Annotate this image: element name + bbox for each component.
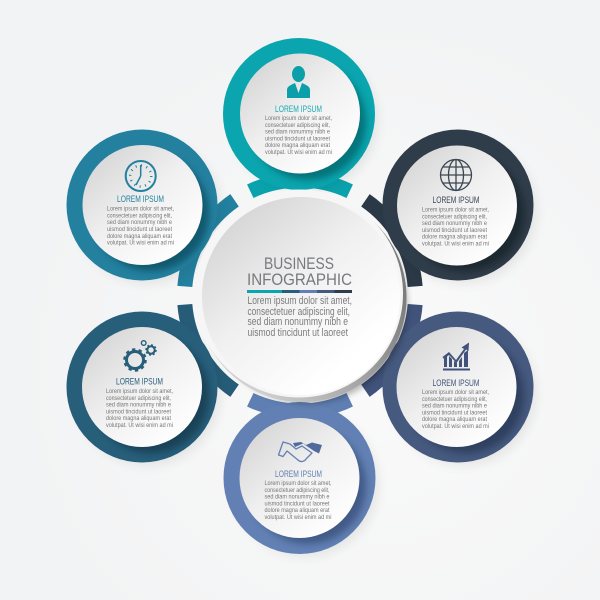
arc connector: upper right: [358, 188, 433, 293]
text block: lower left: uismod tincidunt ut laoreet: [106, 408, 171, 415]
heading: upper left: LOREM IPSUM: [117, 194, 164, 204]
text block: lower left: [106, 388, 173, 429]
text block: upper left: Lorem ipsum dolor sit amet,: [107, 206, 174, 213]
icon: gears: [124, 341, 156, 370]
text block: upper right: volutpat. Ut wisi enim ad mi: [422, 240, 489, 248]
heading: top: LOREM IPSUM: [275, 104, 322, 114]
central text block: consectetuer adipiscing elit,: [248, 306, 350, 318]
text block: bottom: dolore magna aliquam erat: [264, 507, 330, 514]
text block: top: consectetuer adipiscing elit,: [265, 122, 330, 129]
panel: top: [223, 38, 377, 192]
text block: lower left: Lorem ipsum dolor sit amet,: [106, 388, 173, 395]
text block: upper left: dolore magna aliquam erat: [107, 233, 172, 240]
text block: lower left: dolore magna aliquam erat: [106, 415, 171, 422]
central text block: sed diam nonummy nibh e: [248, 316, 348, 328]
text block: bottom: volutpat. Ut wisi enim ad mi: [264, 514, 332, 521]
colour bar: [247, 290, 352, 293]
text block: bottom: consectetuer adipiscing elit,: [264, 487, 330, 494]
text block: lower right: uismod tincidunt ut laoreet: [422, 409, 487, 416]
panel: central disc: [195, 190, 407, 403]
panel: bottom: [224, 402, 378, 556]
text block: upper right: uismod tincidunt ut laoreet: [422, 227, 487, 234]
text block: bottom: uismod tincidunt ut laoreet: [264, 500, 330, 507]
text block: lower right: [422, 389, 489, 430]
title: BUSINESS: [264, 255, 334, 273]
icon: globe: [440, 160, 472, 190]
text block: top: Lorem ipsum dolor sit amet,: [265, 115, 332, 122]
icon: handshake: [278, 442, 322, 462]
text block: lower right: Lorem ipsum dolor sit amet,: [422, 389, 489, 396]
title: INFOGRAPHIC: [247, 271, 352, 289]
text block: lower left: volutpat. Ut wisi enim ad mi: [106, 422, 173, 429]
text block: upper left: volutpat. Ut wisi enim ad mi: [107, 240, 174, 247]
icon: businessman: [287, 66, 310, 98]
text block: upper right: sed diam nonummy nibh e: [422, 220, 487, 227]
title: [247, 255, 352, 289]
text block: bottom: sed diam nonummy nibh e: [264, 494, 330, 501]
text block: bottom: Lorem ipsum dolor sit amet,: [264, 480, 332, 487]
text block: top: [265, 115, 332, 156]
text block: upper right: consectetuer adipiscing elit,: [422, 213, 487, 220]
central text block: [248, 295, 352, 339]
arc connector: lower right: [358, 298, 433, 403]
text block: lower left: sed diam nonummy nibh e: [106, 402, 171, 409]
text block: top: uismod tincidunt ut laoreet: [265, 135, 330, 142]
heading: upper right: LOREM IPSUM: [432, 195, 480, 205]
text block: top: dolore magna aliquam erat: [265, 142, 330, 149]
text block: upper right: dolore magna aliquam erat: [422, 234, 487, 241]
text block: top: volutpat. Ut wisi enim ad mi: [265, 149, 332, 156]
central text block: uismod tincidunt ut laoreet: [248, 327, 348, 339]
text block: lower right: consectetuer adipiscing elit,: [422, 396, 487, 403]
text block: upper left: [107, 206, 174, 247]
panel: lower left: [66, 312, 220, 465]
text block: upper right: [422, 206, 489, 248]
text block: upper left: uismod tincidunt ut laoreet: [107, 226, 172, 233]
text block: upper right: Lorem ipsum dolor sit amet,: [422, 206, 489, 214]
arc connector: upper left: [167, 188, 242, 293]
text block: lower right: dolore magna aliquam erat: [422, 416, 487, 423]
text block: bottom: [264, 480, 332, 521]
central text block: Lorem ipsum dolor sit amet,: [248, 295, 352, 307]
text block: upper left: consectetuer adipiscing elit,: [107, 212, 172, 219]
text block: top: sed diam nonummy nibh e: [265, 129, 330, 136]
arc connector: lower left: [167, 298, 242, 403]
panel: upper right: [382, 130, 536, 283]
panel: upper left: [66, 130, 220, 283]
heading: lower left: LOREM IPSUM: [116, 377, 163, 387]
text block: lower right: volutpat. Ut wisi enim ad mi: [422, 423, 489, 430]
text block: lower left: consectetuer adipiscing elit,: [106, 395, 171, 402]
icon: growth chart: [442, 342, 470, 370]
arc connector: bottom: [247, 393, 353, 418]
panel: lower right: [382, 312, 536, 465]
heading: lower right: LOREM IPSUM: [432, 378, 480, 388]
text block: upper left: sed diam nonummy nibh e: [107, 219, 172, 226]
heading: bottom: LOREM IPSUM: [275, 469, 322, 479]
arc connector: top: [247, 173, 353, 198]
text block: lower right: sed diam nonummy nibh e: [422, 403, 487, 410]
icon: clock: [126, 161, 156, 191]
